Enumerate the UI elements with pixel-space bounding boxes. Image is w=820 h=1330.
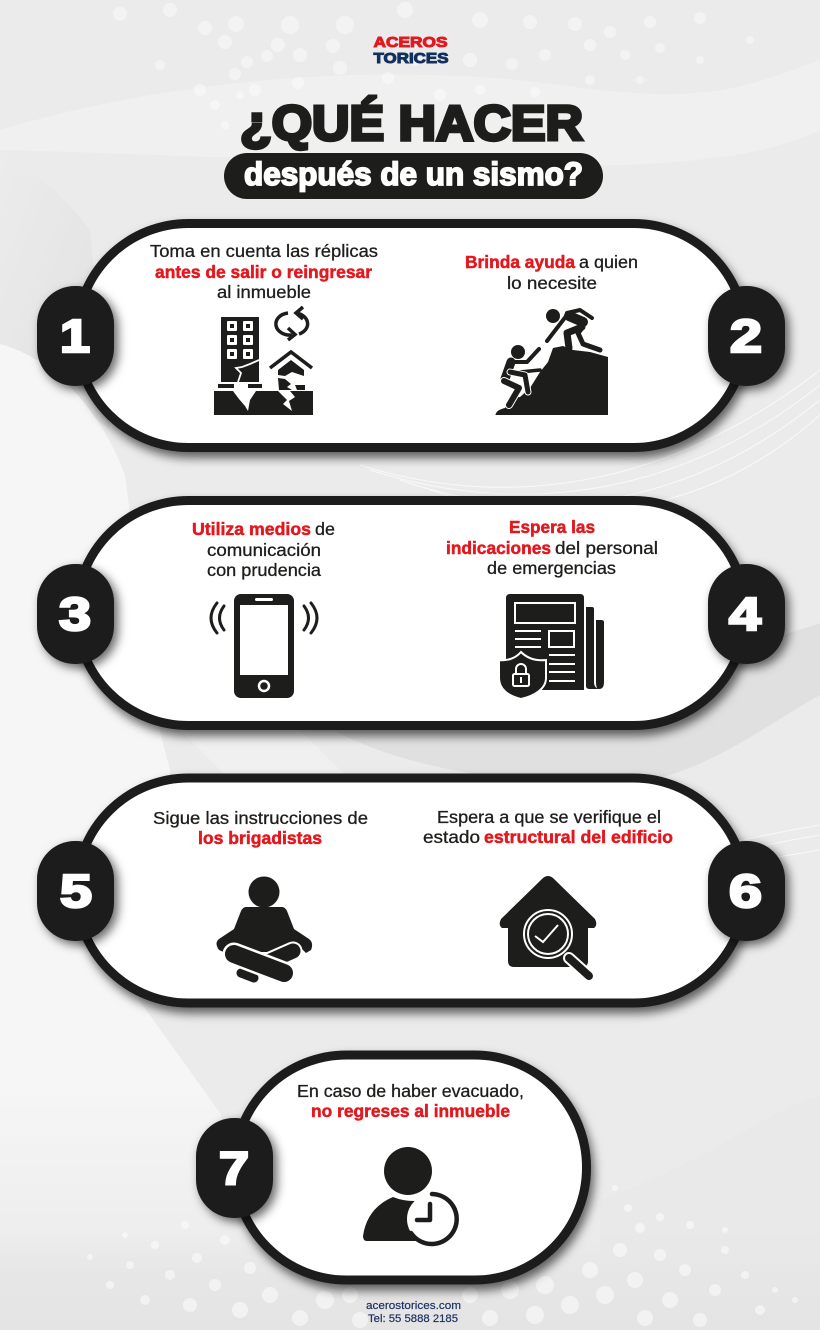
icon: newspaper with shield [499, 594, 604, 699]
icon: seated person [216, 876, 312, 978]
step 4 text [446, 517, 658, 578]
subtitle pill: después de un sismo? [244, 156, 583, 192]
icon: smartphone [211, 594, 317, 698]
badge 7 [196, 1118, 273, 1218]
step 3 text: con prudencia [207, 560, 321, 580]
panel: steps 3 and 4 [76, 500, 746, 726]
step 3 text [192, 519, 335, 580]
step 4 text: indicaciones [446, 538, 551, 558]
step 3 text: Utiliza medios [192, 519, 311, 539]
step 2 text [465, 252, 638, 293]
step 4 text: del personal [555, 538, 658, 558]
icon: person with clock [363, 1147, 457, 1244]
step 4 text: de emergencias [487, 558, 616, 578]
step 7 text [297, 1081, 524, 1121]
step 5 text: los brigadistas [198, 828, 322, 848]
step 5 text [153, 808, 368, 848]
panel shape [76, 224, 746, 448]
step 2 text: Brinda ayuda [465, 252, 575, 272]
panel shape [234, 1055, 586, 1280]
badge 3 [37, 564, 114, 664]
icon: damaged buildings [214, 307, 313, 415]
dots texture bottom [87, 1185, 798, 1328]
step 6 text: estado [423, 827, 480, 847]
badge 1 [37, 286, 114, 386]
footer contact: Tel: 55 5888 2185 [368, 1313, 458, 1325]
icon: house inspection [500, 876, 596, 976]
dots texture top [113, 2, 754, 129]
step 3 text: de [315, 519, 335, 539]
step 1 text: antes de salir o reingresar [155, 262, 372, 282]
logo: TORICES [374, 50, 448, 67]
footer contact: acerostorices.com [366, 1300, 461, 1312]
step 1 text: al inmueble [217, 282, 311, 302]
step 6 text: estructural del edificio [484, 827, 673, 847]
step 1 text: Toma en cuenta las réplicas [150, 241, 378, 261]
icon: climbers helping [496, 309, 608, 415]
step 2 text: a quien [579, 252, 638, 272]
badge 1: 1 [60, 310, 90, 362]
panel shape [76, 778, 746, 1003]
badge 2: 2 [730, 310, 762, 362]
badge 2 [708, 286, 785, 386]
step 6 text [423, 807, 673, 847]
step 2 text: lo necesite [507, 273, 597, 293]
badge 5 [37, 841, 114, 941]
panel: step 7 [234, 1055, 586, 1280]
title: ¿QUÉ HACER [240, 97, 583, 151]
step 1 text [150, 241, 378, 302]
step 3 text: comunicación [207, 540, 321, 560]
step 5 text: Sigue las instrucciones de [153, 808, 368, 828]
step 7 text: En caso de haber evacuado, [297, 1081, 524, 1101]
footer contact [366, 1300, 461, 1325]
logo: ACEROS [374, 34, 448, 51]
badge 6: 6 [729, 865, 762, 917]
badge 5: 5 [60, 865, 92, 917]
badge 6 [708, 841, 785, 941]
panel: steps 5 and 6 [76, 778, 746, 1003]
logo [374, 34, 448, 67]
step 4 text: Espera las [509, 517, 595, 537]
badge 7: 7 [219, 1142, 249, 1194]
step 7 text: no regreses al inmueble [311, 1101, 510, 1121]
panel shape [76, 500, 746, 726]
badge 4: 4 [729, 588, 762, 640]
badge 4 [708, 564, 785, 664]
step 6 text: Espera a que se verifique el [437, 807, 661, 827]
badge 3: 3 [59, 588, 91, 640]
panel: steps 1 and 2 [76, 224, 746, 448]
